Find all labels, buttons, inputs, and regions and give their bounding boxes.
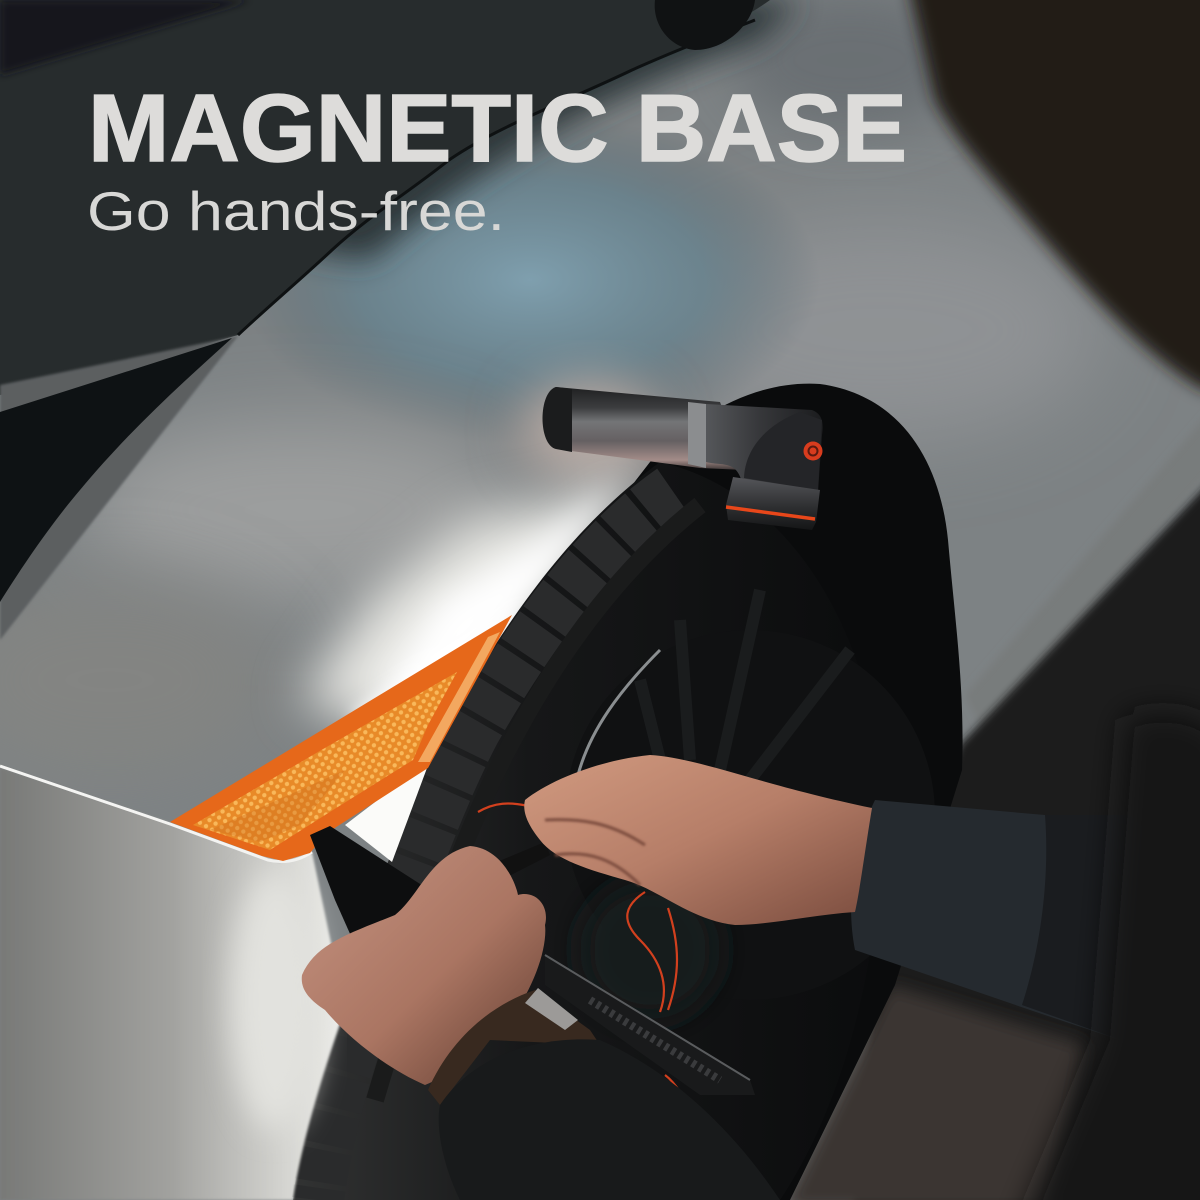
lower right panel stripe [965,400,1200,735]
subtitle: Go hands-free. [87,180,505,242]
flashlight power button [804,442,822,460]
ground [780,985,1085,1200]
title: MAGNETIC BASE [88,75,907,182]
tire shoulder [375,505,700,1100]
jacket outer shell [1022,815,1145,1045]
roof strip [0,0,250,75]
black lamp bracket [545,955,755,1095]
panel edge highlight [0,766,312,862]
flashlight orange ring [726,507,815,519]
flashlight tube [544,387,745,470]
white panel gap [345,760,430,862]
fender beam highlight [300,470,640,740]
shadow band beside seam [300,0,800,260]
flashlight collar [688,402,706,468]
finger creases [545,820,645,885]
head silhouette [905,0,1200,400]
orange wires [478,804,716,1152]
orange side reflector [170,615,512,861]
connector plug [497,842,550,878]
tire tread [318,490,672,1200]
body shadow right [1020,712,1200,1200]
lower front panel [0,768,345,1200]
wrist watch [428,988,600,1105]
jacket sleeve right arm [851,800,1145,1045]
tire [293,462,882,1200]
door seam line [238,20,755,335]
black lamp housing [310,826,445,945]
flashlight lens head [726,477,820,530]
reflector side strip [418,632,500,762]
dark right area [850,450,1200,1200]
flashlight end cap [542,387,572,452]
fuel cap [655,0,755,50]
flashlight elbow [706,404,823,492]
right hand [524,755,872,925]
dark upper door and window area [0,0,770,395]
flashlight [542,387,823,530]
jacket sleeve left arm [439,1039,780,1200]
wheel arch [300,384,963,1200]
reflector lens [193,672,457,850]
wheel rim [565,590,935,1020]
lower door band [0,336,238,640]
left hand [302,846,546,1085]
side window [0,338,232,602]
